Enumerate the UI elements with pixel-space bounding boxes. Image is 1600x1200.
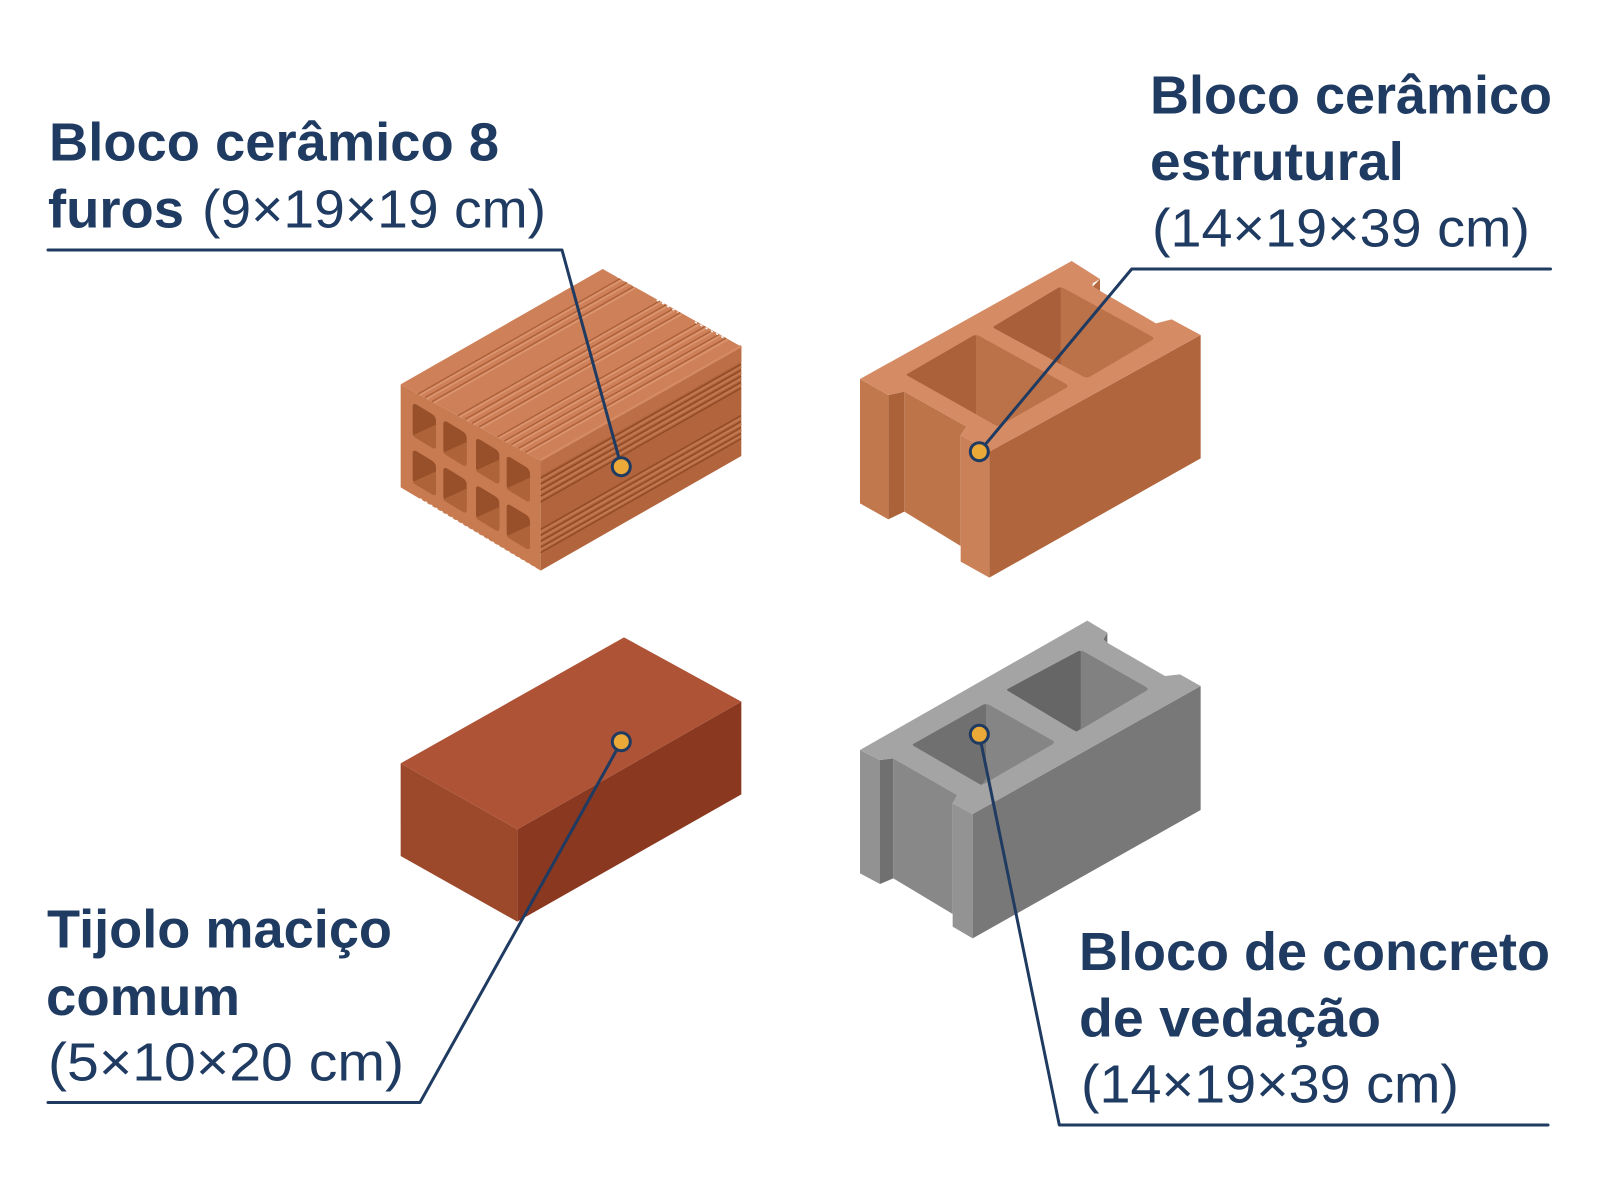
leader line	[48, 250, 621, 467]
right flange	[953, 803, 973, 938]
front face	[401, 384, 541, 571]
hole 1	[913, 704, 1054, 785]
serrated edges	[400, 277, 742, 569]
label	[1150, 65, 1552, 259]
marker dot	[612, 733, 630, 751]
label	[48, 113, 546, 240]
marker dot	[970, 725, 988, 743]
label: Tijolo maciço	[47, 900, 392, 960]
left flange	[860, 750, 880, 884]
long side	[973, 686, 1201, 938]
callout: ceramic 8-hole block	[48, 113, 630, 476]
label: Bloco cerâmico 8	[49, 113, 499, 173]
label	[1079, 922, 1550, 1114]
callout: solid common brick	[46, 733, 630, 1102]
top face	[401, 637, 741, 829]
top face	[860, 621, 1201, 814]
label: comum	[46, 967, 240, 1027]
label: furos	[48, 180, 184, 240]
leader line	[979, 269, 1550, 452]
top notch shadow	[1103, 633, 1107, 643]
brick: concrete sealing block	[860, 621, 1201, 938]
right flange	[961, 435, 989, 578]
top front highlight	[541, 346, 741, 460]
brick: solid common brick	[401, 637, 741, 922]
hole 1	[907, 335, 1068, 426]
label: (9×19×19 cm)	[202, 180, 546, 240]
label: Bloco de concreto	[1079, 922, 1550, 982]
top face grooves	[418, 279, 728, 454]
right face	[541, 347, 741, 571]
right face grooves	[541, 364, 741, 553]
hole 2	[1007, 651, 1148, 732]
brick: structural ceramic block	[860, 261, 1201, 578]
marker dot	[612, 458, 630, 476]
marker dot	[970, 443, 988, 461]
flange recess	[888, 392, 904, 519]
label: (14×19×39 cm)	[1152, 199, 1530, 259]
left flange	[860, 379, 888, 519]
long side	[989, 335, 1201, 578]
right face	[517, 702, 741, 922]
hole 2	[993, 287, 1153, 377]
label: de vedação	[1079, 989, 1381, 1049]
inner front face	[904, 392, 967, 546]
label: (14×19×39 cm)	[1081, 1054, 1459, 1114]
top face	[860, 261, 1201, 452]
callout: structural ceramic block	[970, 65, 1552, 461]
brick: ceramic 8-hole block	[400, 269, 742, 571]
leader line	[979, 734, 1548, 1125]
label	[46, 900, 404, 1093]
inner front face	[893, 758, 957, 914]
label: estrutural	[1150, 132, 1404, 192]
front face	[401, 763, 517, 922]
top notch shadow	[1093, 279, 1100, 291]
hole row 1	[413, 404, 530, 501]
label: Bloco cerâmico	[1150, 65, 1552, 125]
label: (5×10×20 cm)	[48, 1033, 404, 1093]
hole row 2	[413, 451, 530, 549]
leader line	[48, 742, 621, 1102]
flange recess	[880, 758, 893, 884]
holes	[413, 404, 530, 549]
top face	[401, 269, 741, 461]
callout: concrete sealing block	[970, 725, 1550, 1125]
